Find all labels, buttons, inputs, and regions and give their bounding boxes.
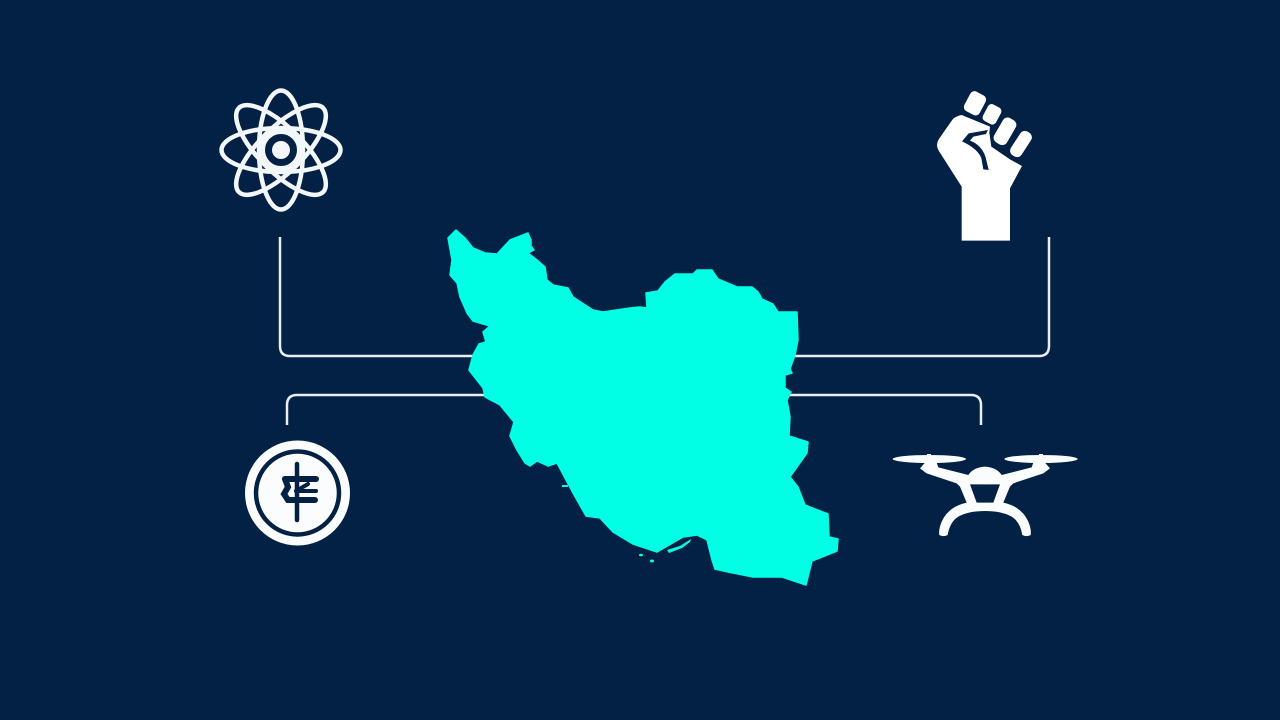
connector: atom to map: [280, 237, 480, 356]
icon: currency coin: [245, 440, 350, 546]
icon: raised fist: [937, 90, 1034, 241]
islands: [562, 485, 691, 562]
icon: atom: [222, 90, 340, 210]
map of Iran: [448, 230, 838, 585]
connector: drone to map: [785, 395, 981, 425]
icon: drone: [893, 454, 1078, 536]
connector: fist to map: [790, 237, 1049, 356]
currency symbol: [284, 464, 316, 520]
connector: coin to map: [287, 395, 495, 425]
